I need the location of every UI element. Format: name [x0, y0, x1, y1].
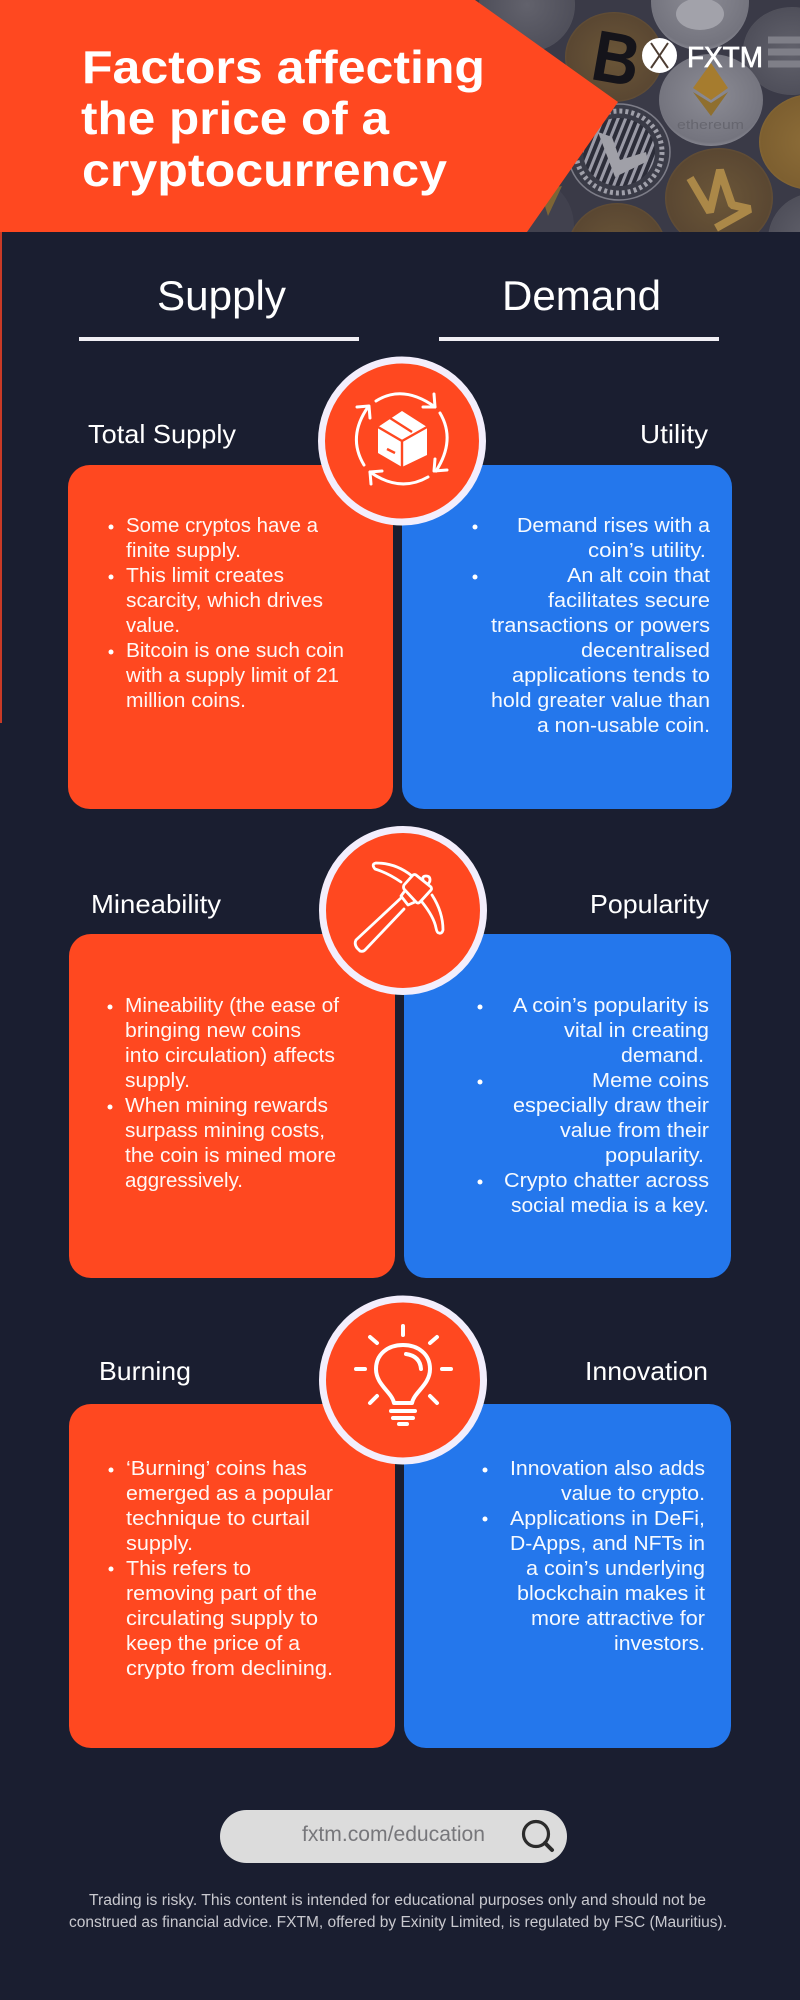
text: Innovation bullets: more attractive for — [531, 1608, 705, 1630]
text: Mineability bullets: Mineability (the ease of — [125, 995, 339, 1017]
title: cryptocurrency — [82, 144, 447, 196]
card: Popularity — [404, 934, 731, 1278]
label: Popularity: Popularity — [590, 889, 709, 919]
text: Burning bullets: supply. — [126, 1533, 193, 1555]
panel: Utility — [402, 419, 732, 809]
text: Innovation bullets: Innovation also adds — [510, 1458, 705, 1480]
text: Innovation bullets: D-Apps, and NFTs in — [510, 1533, 705, 1555]
title: the price of a — [81, 92, 389, 144]
text: Burning bullets: circulating supply to — [126, 1608, 318, 1630]
text: Total Supply bullets: Bitcoin is one such coin — [126, 640, 344, 662]
card: Innovation — [404, 1404, 731, 1748]
text: Popularity bullets: demand. — [621, 1045, 704, 1067]
card: Utility — [402, 465, 732, 809]
text: Popularity bullets: popularity. — [605, 1145, 704, 1167]
text: Total Supply bullets: with a supply limit of 21 — [125, 665, 339, 687]
text: Innovation bullets: investors. — [614, 1633, 705, 1655]
title: Factors affecting — [82, 41, 485, 93]
icon: magnifier — [524, 1822, 552, 1850]
text: Innovation bullets: blockchain makes it — [517, 1583, 705, 1605]
text: Total Supply bullets: finite supply. — [126, 540, 241, 562]
label: Innovation: Innovation — [585, 1356, 708, 1386]
text: Burning bullets: keep the price of a — [126, 1633, 301, 1655]
text: Burning bullets: ‘Burning’ coins has — [126, 1458, 307, 1480]
orange title banner — [0, 0, 618, 232]
text: Popularity bullets: social media is a key. — [511, 1195, 709, 1217]
panel: Popularity — [404, 889, 731, 1278]
disclaimer: construed as financial advice. FXTM, offered by Exinity Limited, is regulated by FSC (Mauritius). — [69, 1914, 727, 1931]
text: Mineability bullets: aggressively. — [125, 1170, 243, 1192]
icon: light bulb — [322, 1299, 484, 1461]
heading: Demand: Demand — [502, 272, 661, 319]
panel: Burning — [69, 1356, 395, 1748]
text: Popularity bullets: A coin’s popularity is — [513, 995, 709, 1017]
search bar: fxtm.com/education — [302, 1823, 485, 1846]
text: Popularity bullets: Meme coins — [592, 1070, 709, 1092]
card: Mineability — [69, 934, 395, 1278]
text: Burning bullets: technique to curtail — [126, 1508, 310, 1530]
text: Innovation bullets: Applications in DeFi, — [510, 1508, 705, 1530]
text: Burning bullets: crypto from declining. — [126, 1658, 333, 1680]
heading: Demand — [439, 272, 719, 341]
text: Mineability bullets: supply. — [125, 1070, 190, 1092]
text: Total Supply bullets: This limit creates — [126, 565, 284, 587]
text: Mineability bullets: surpass mining costs, — [125, 1120, 325, 1142]
FXTM logo — [642, 38, 763, 74]
card: Total Supply — [68, 465, 393, 809]
text: Utility bullets: a non-usable coin. — [537, 715, 710, 737]
text: Popularity bullets: value from their — [560, 1120, 709, 1142]
text: Total Supply bullets: Some cryptos have a — [126, 515, 319, 537]
text: Burning bullets — [108, 1458, 333, 1680]
panel: Mineability — [69, 889, 395, 1278]
panel: Innovation — [404, 1356, 731, 1748]
label: Mineability: Mineability — [91, 889, 221, 919]
icon: box with circular arrows — [322, 360, 482, 522]
text: Utility bullets: Demand rises with a — [517, 515, 711, 537]
coin photo collage: ethereum — [677, 117, 744, 132]
text: Popularity bullets — [478, 995, 709, 1217]
text: Utility bullets: An alt coin that — [567, 565, 710, 587]
text: Innovation bullets — [482, 1458, 705, 1655]
title — [81, 41, 485, 196]
card: Burning — [69, 1404, 395, 1748]
text: Burning bullets: This refers to — [126, 1558, 251, 1580]
coin photo collage: B — [586, 16, 646, 103]
text: Popularity bullets: vital in creating — [564, 1020, 709, 1042]
text: Innovation bullets: a coin’s underlying — [526, 1558, 705, 1580]
icon: pickaxe — [322, 830, 484, 992]
text: Mineability bullets — [108, 995, 339, 1192]
panel: Total Supply — [68, 419, 393, 809]
heading: Supply: Supply — [157, 272, 286, 319]
text: Mineability bullets: When mining rewards — [125, 1095, 328, 1117]
coin photo collage — [475, 0, 800, 232]
text: Mineability bullets: bringing new coins — [125, 1020, 301, 1042]
text: Popularity bullets: especially draw their — [513, 1095, 709, 1117]
text: Utility bullets: decentralised — [581, 640, 710, 662]
disclaimer — [69, 1892, 727, 1931]
text: Total Supply bullets — [108, 515, 344, 712]
disclaimer: Trading is risky. This content is intended for educational purposes only and should not be — [89, 1892, 706, 1909]
label: Utility: Utility — [640, 419, 708, 449]
text: Utility bullets: transactions or powers — [491, 615, 710, 637]
heading: Supply — [79, 272, 359, 341]
panel: header — [0, 0, 800, 232]
text: Utility bullets: coin’s utility. — [588, 540, 706, 562]
text: Innovation bullets: value to crypto. — [561, 1483, 705, 1505]
label: Burning: Burning — [99, 1356, 191, 1386]
text: Mineability bullets: into circulation) affects — [125, 1045, 335, 1067]
text: Utility bullets: facilitates secure — [548, 590, 710, 612]
text: Popularity bullets: Crypto chatter across — [504, 1170, 709, 1192]
text: Utility bullets: hold greater value than — [491, 690, 710, 712]
label: Total Supply: Total Supply — [88, 419, 236, 449]
FXTM logo: FXTM — [687, 42, 763, 74]
text: Burning bullets: removing part of the — [126, 1583, 317, 1605]
text: Total Supply bullets: value. — [126, 615, 180, 637]
search bar — [220, 1810, 567, 1863]
text: Mineability bullets: the coin is mined more — [125, 1145, 336, 1167]
text: Utility bullets: applications tends to — [512, 665, 710, 687]
text: Utility bullets — [472, 515, 711, 737]
text: Burning bullets: emerged as a popular — [126, 1483, 333, 1505]
text: Total Supply bullets: million coins. — [126, 690, 246, 712]
text: Total Supply bullets: scarcity, which drives — [126, 590, 323, 612]
